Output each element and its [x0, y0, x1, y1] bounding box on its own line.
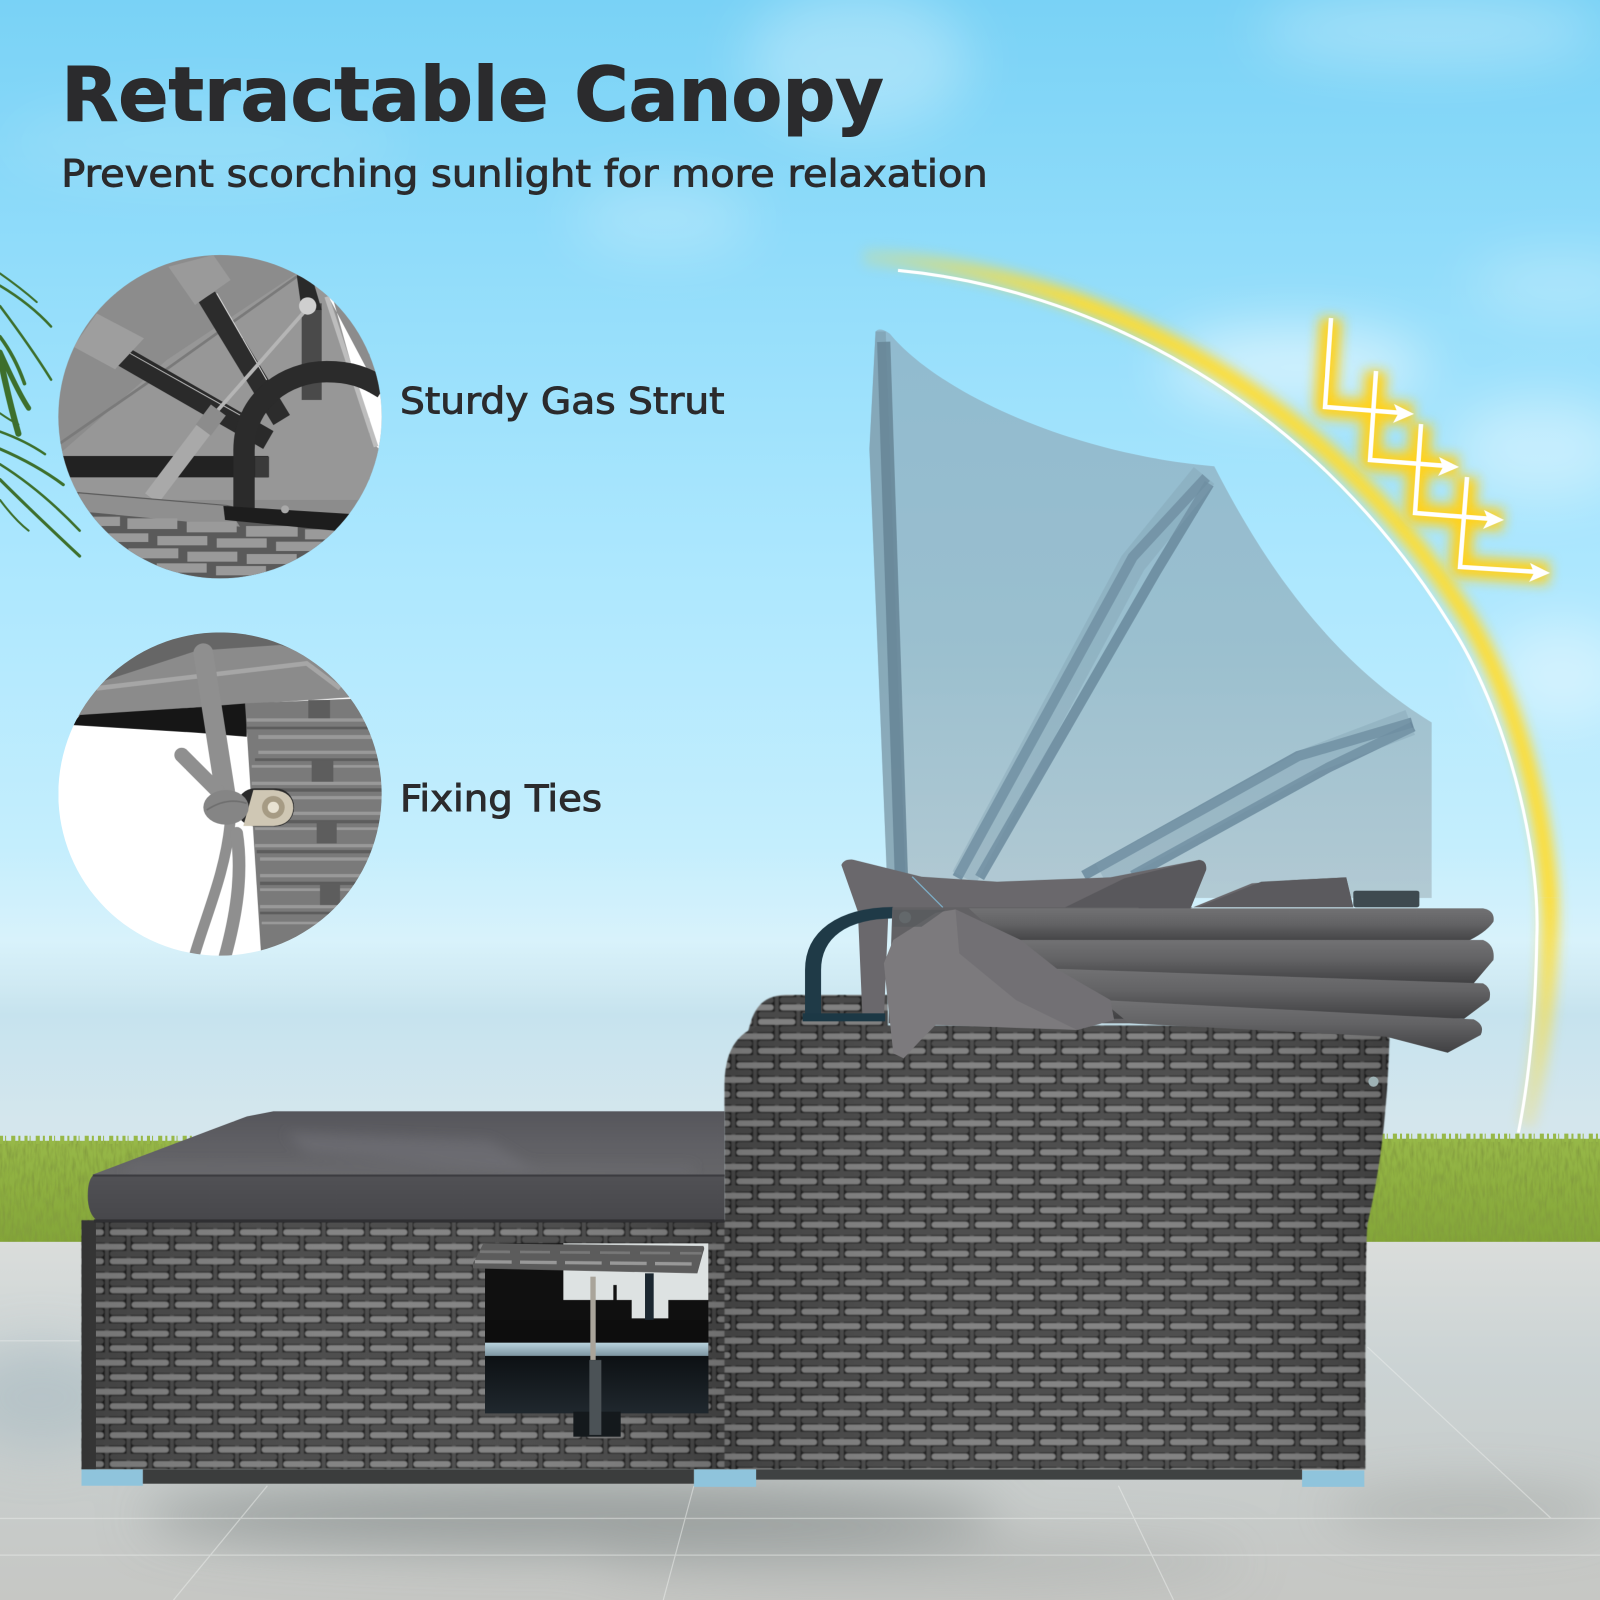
subtitle: Prevent scorching sunlight for more relaxation: [61, 152, 988, 196]
daybed: [82, 330, 1494, 1487]
sunlight arrows: [1325, 318, 1550, 582]
label: fixing ties: Fixing Ties: [400, 777, 602, 820]
seat wicker base: [82, 1220, 727, 1469]
sunlight arc: [862, 257, 1550, 1133]
handle: [813, 913, 893, 1017]
open canopy ghost: [869, 330, 1432, 898]
folded canopy, pillows and handle: [803, 859, 1494, 1058]
rib sockets: [168, 255, 231, 305]
pillows: [841, 859, 1353, 1020]
detail photo: fixing ties: [53, 630, 387, 963]
sky background: [0, 0, 1600, 1245]
small wicker block: [1353, 891, 1419, 907]
side window opening: [473, 1243, 708, 1437]
seat cushion: [88, 1111, 724, 1222]
canopy rib bars: [123, 293, 282, 440]
wicker side: [245, 697, 387, 963]
detail photo: sturdy gas strut: [53, 250, 387, 587]
draped fabric: [884, 909, 1114, 1058]
wicker base: [76, 492, 336, 578]
handle: [244, 372, 383, 508]
patio floor: [0, 1242, 1600, 1600]
strut rod: [216, 312, 305, 411]
main back wicker panel: [724, 1026, 1390, 1469]
under-bed shadow: [143, 1469, 1302, 1484]
slot bracket: [237, 788, 294, 826]
label: sturdy gas strut: Sturdy Gas Strut: [400, 379, 724, 422]
rope: [182, 653, 239, 957]
title: Retractable Canopy: [61, 51, 884, 138]
grass strip: [0, 1138, 1600, 1247]
fabric backing: [889, 907, 1157, 1023]
palm fronds: [0, 273, 80, 556]
fabric rolls: [969, 908, 1494, 943]
upper back wicker hump: [748, 995, 888, 1033]
feet: [82, 1469, 1364, 1487]
